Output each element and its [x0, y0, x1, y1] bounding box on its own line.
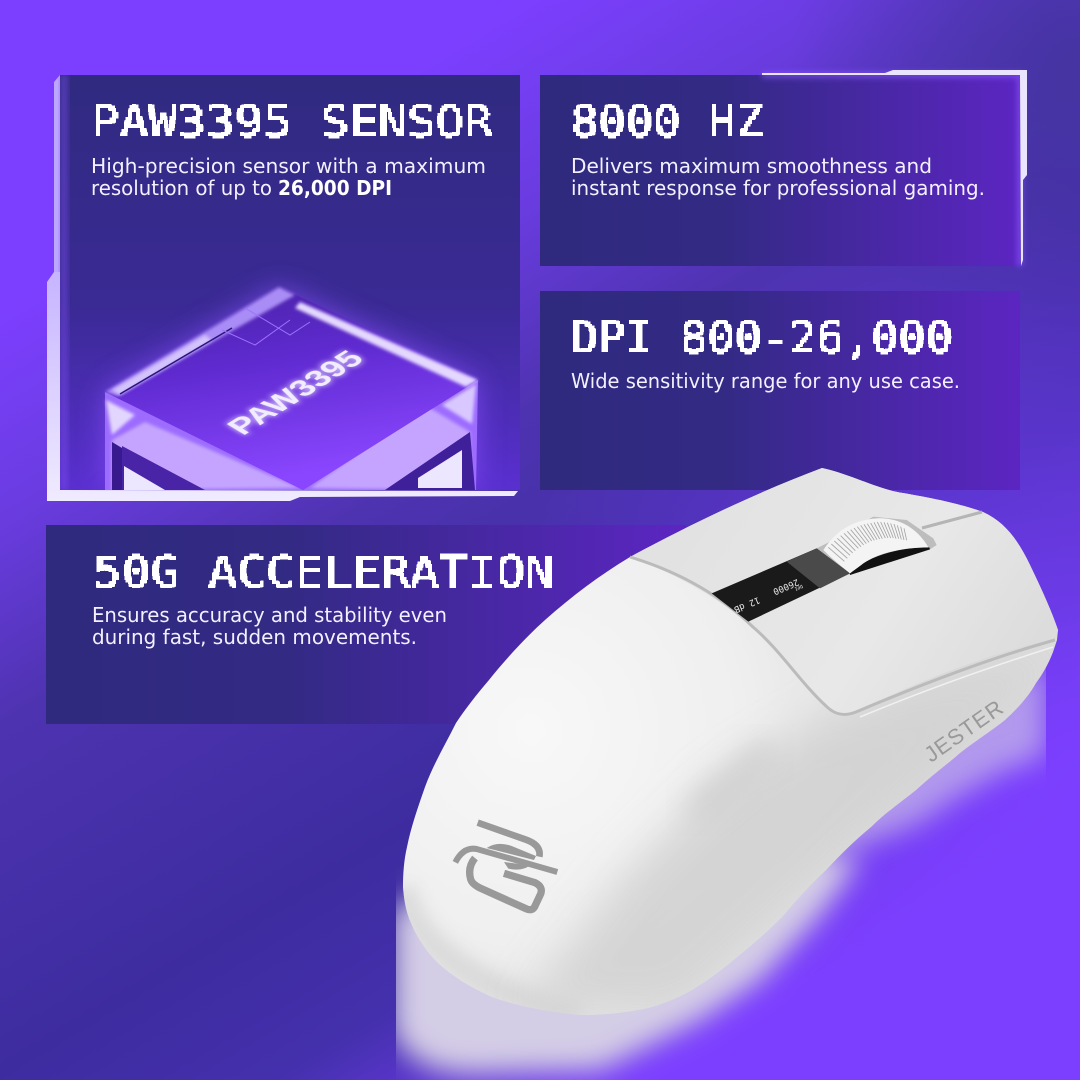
scroll wheel [823, 518, 928, 573]
panel background [46, 525, 686, 724]
panel: DPI range [540, 291, 1020, 490]
heading: PAW3395 SENSOR [91, 97, 494, 148]
description: instant response for professional gaming. [571, 176, 985, 200]
screen readout: DPI [793, 583, 804, 592]
description: High-precision sensor with a maximum [91, 154, 486, 178]
icon: brand logo [455, 823, 557, 910]
screen readout: 26000 [771, 576, 800, 596]
chip label: PAW3395 [219, 345, 371, 439]
frame: lower-left corner accent [47, 75, 518, 501]
button seam [630, 557, 1055, 714]
buttons [630, 468, 1058, 714]
screen readout [732, 576, 804, 614]
brand name: JESTER [920, 695, 1008, 767]
wheel cavity [850, 547, 930, 575]
description: Ensures accuracy and stability even [92, 603, 447, 627]
mouse product image [403, 468, 1060, 1015]
body shading [403, 704, 950, 1015]
frame: upper-right corner accent [762, 70, 1027, 266]
mouse body [403, 468, 1058, 1015]
panel: 8000 Hz [540, 75, 1020, 266]
heading: 8000 HZ [571, 97, 763, 148]
description: Delivers maximum smoothness and [571, 154, 932, 178]
screen readout: 12 dB [732, 594, 761, 614]
panel background [540, 291, 1020, 490]
panel: 50G acceleration [46, 525, 686, 724]
panel background [60, 75, 520, 490]
description [91, 154, 486, 200]
panel: PAW3395 sensor [60, 75, 520, 490]
panel background [540, 75, 1020, 266]
description [571, 154, 985, 200]
heading: DPI 800-26,000 [571, 313, 953, 364]
description: resolution of up to [91, 176, 272, 200]
screen [712, 548, 850, 622]
mouse glow [392, 660, 1046, 1074]
description [92, 603, 447, 649]
heading: 50G ACCELERATION [93, 547, 554, 598]
display and scroll wheel [712, 517, 937, 622]
centre seam [922, 512, 982, 528]
description: 26,000 DPI [278, 176, 392, 200]
wheel well [817, 517, 937, 575]
chip image [105, 287, 478, 490]
side seam highlight [860, 647, 1053, 717]
description: during fast, sudden movements. [92, 625, 417, 649]
description: Wide sensitivity range for any use case. [571, 369, 960, 393]
